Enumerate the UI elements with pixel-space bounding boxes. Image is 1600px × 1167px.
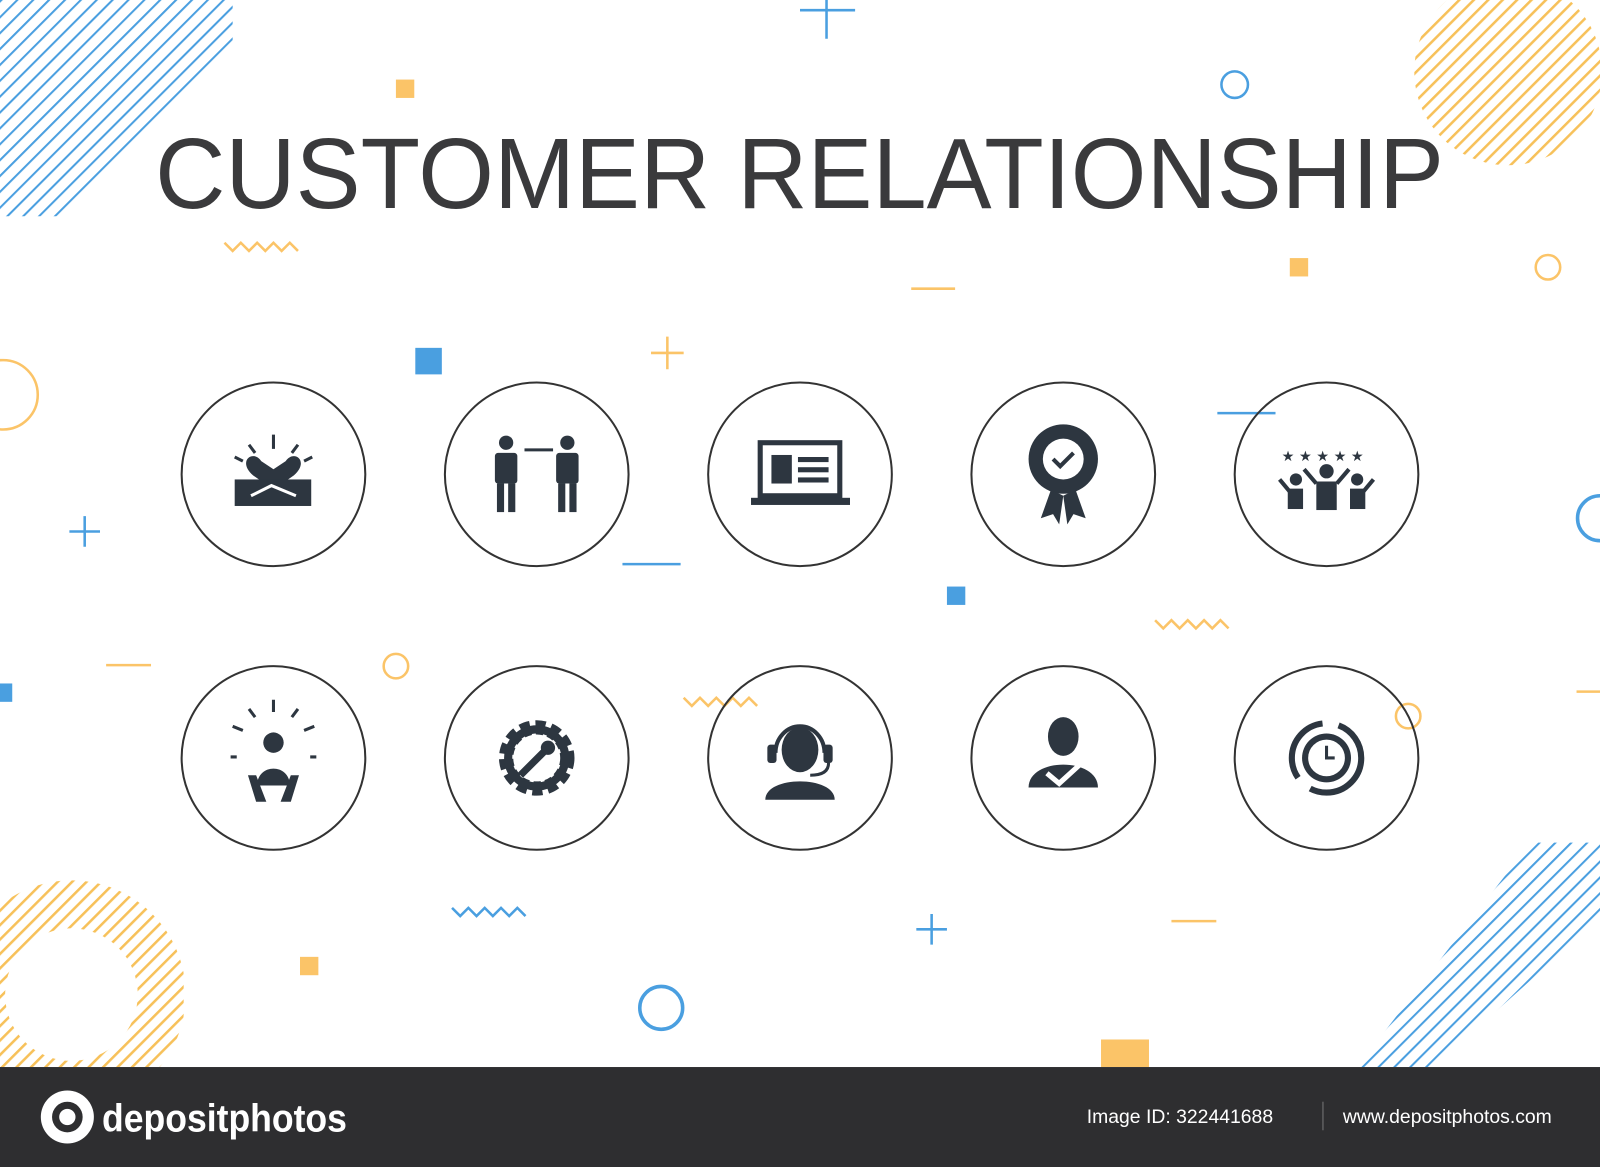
footer bar [0, 1067, 1600, 1167]
decoration: bottom-right stripes [1357, 843, 1600, 1067]
icon: laptop profile [751, 443, 850, 505]
footer logo: depositphotos [102, 1097, 347, 1140]
footer url: www.depositphotos.com [1342, 1106, 1552, 1128]
icon: happy customers stars [1280, 449, 1373, 510]
decoration: top-left stripes [0, 0, 233, 216]
icon: person in hands [231, 700, 316, 802]
icon: support agent [765, 726, 835, 800]
title: CUSTOMER RELATIONSHIP [155, 118, 1444, 230]
icon: two businessmen [495, 436, 579, 512]
icon: verified user [1029, 717, 1098, 788]
icon: happy customers stars: ★ ★ ★ ★ ★ [1282, 449, 1364, 465]
footer logo [41, 1090, 347, 1144]
decoration: bottom-left yellow ring [0, 880, 184, 1067]
icon: clock cycle [1292, 723, 1361, 793]
icon grid [182, 383, 1418, 850]
icon: award badge [1029, 424, 1098, 524]
icon: handshake heart [235, 435, 312, 506]
footer image id: Image ID: 322441688 [1087, 1106, 1273, 1128]
decoration: top-right yellow circle [1414, 0, 1600, 165]
icon: gear wrench [506, 727, 567, 789]
